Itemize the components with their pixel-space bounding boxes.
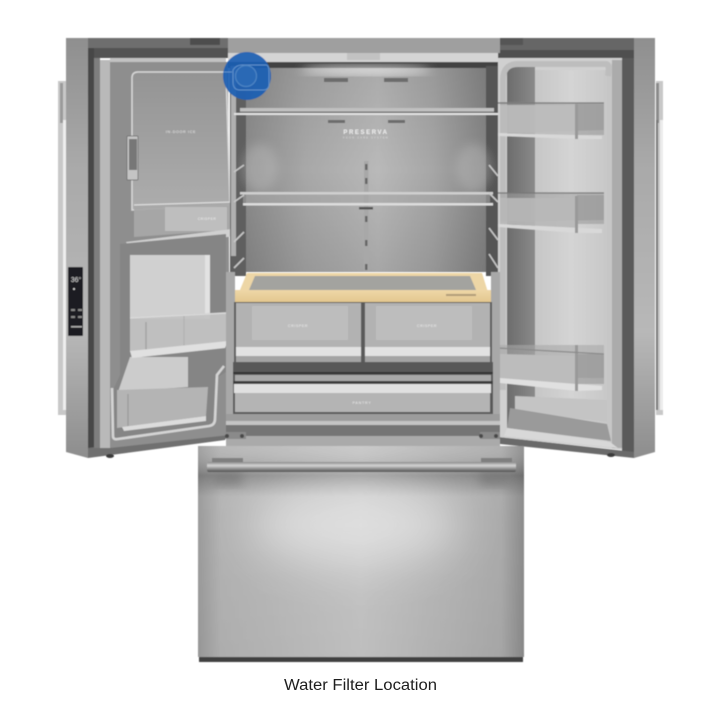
left door foot — [106, 454, 114, 458]
water filter highlight — [223, 52, 271, 100]
upper door bin: CRISPER — [198, 217, 216, 221]
center rail — [364, 161, 368, 271]
vents — [324, 78, 408, 123]
interior side walls — [230, 66, 498, 276]
back wall — [242, 66, 492, 272]
lower interior sides — [226, 272, 500, 422]
right door — [490, 38, 663, 458]
left door gasket — [94, 58, 226, 448]
left door — [58, 38, 240, 458]
handle shadow — [214, 471, 508, 485]
drawer front — [198, 446, 524, 657]
caption: Water Filter Location — [284, 677, 437, 694]
preserva logo: PRESERVA — [343, 130, 389, 136]
crisper drawers — [234, 302, 492, 364]
right door handle — [656, 81, 663, 415]
right upper bin — [498, 102, 604, 139]
ceiling — [228, 38, 500, 68]
pantry drawer: PANTRY — [352, 401, 372, 405]
right door foot — [607, 453, 615, 457]
right door outer edge — [634, 38, 655, 458]
in-door ice panel — [127, 72, 230, 210]
label: in-door ice: IN-DOOR ICE — [166, 130, 196, 134]
right crisper — [365, 303, 490, 362]
lower door bin — [112, 366, 224, 439]
drawer feet — [199, 657, 523, 662]
preserva logo: FOOD CARE SYSTEM — [343, 136, 389, 140]
left crisper — [236, 303, 361, 362]
lower frame — [225, 414, 500, 446]
preserva logo — [343, 130, 389, 140]
freezer drawer — [198, 446, 524, 662]
right crisper: CRISPER — [417, 324, 437, 328]
drawer handle — [207, 462, 516, 472]
right lower bin — [497, 345, 604, 391]
pantry drawer — [233, 362, 493, 414]
ice bin latch — [127, 136, 138, 180]
shelf supports — [234, 165, 498, 268]
refrigerator — [58, 38, 663, 662]
right door liner — [503, 60, 622, 448]
top shelf — [234, 108, 498, 115]
left crisper: CRISPER — [288, 324, 308, 328]
interior — [225, 38, 500, 446]
left door liner — [110, 62, 230, 448]
left door outer edge — [66, 38, 88, 458]
middle door bin — [130, 312, 229, 358]
right middle bin — [498, 193, 604, 233]
drawer highlight — [250, 485, 460, 565]
control display — [68, 267, 83, 336]
upper door bin — [126, 202, 240, 250]
wood cover — [235, 273, 491, 302]
handle posts — [212, 458, 512, 464]
lower door recess — [114, 234, 226, 438]
control display: 36° — [71, 276, 81, 284]
middle shelf — [240, 192, 493, 210]
left door handle — [58, 81, 66, 415]
